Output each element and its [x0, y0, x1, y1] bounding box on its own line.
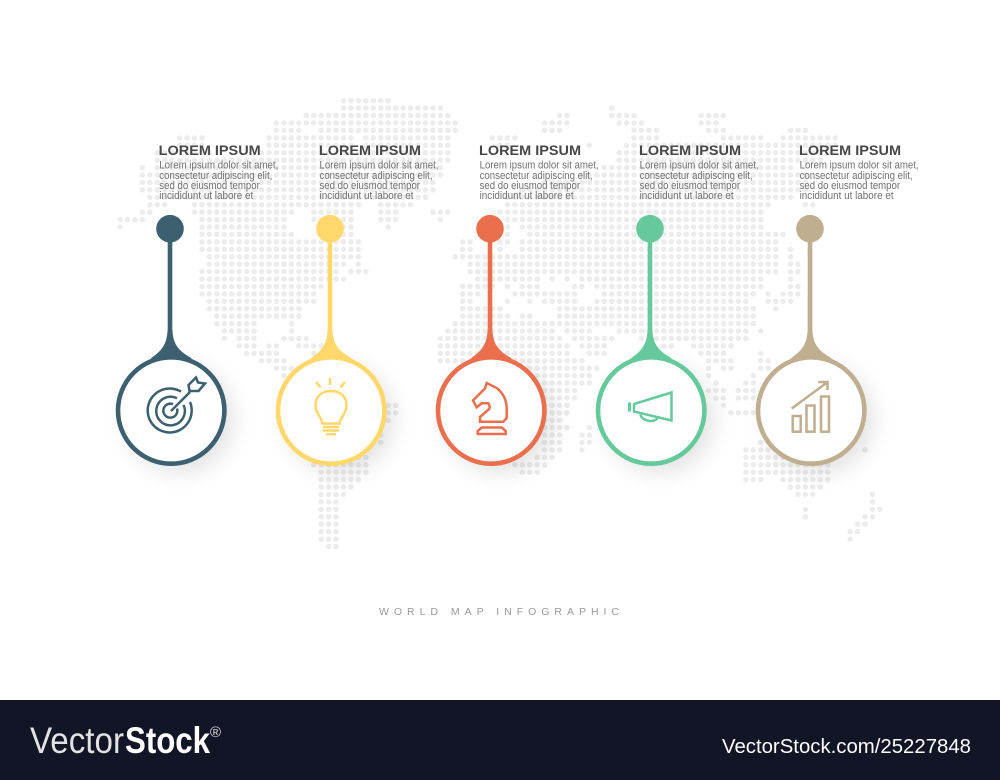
- footer band: [0, 700, 1000, 780]
- step 4: megaphone pin: [598, 215, 714, 473]
- body 1: sed do eiusmod tempor: [159, 180, 260, 192]
- body 4: sed do eiusmod tempor: [640, 180, 741, 192]
- text block 2: [319, 142, 438, 202]
- dotted world map: [120, 101, 880, 546]
- body 4: Lorem ipsum dolor sit amet,: [640, 160, 759, 172]
- body 5: consectetur adipiscing elit,: [800, 170, 913, 182]
- body 1: [159, 160, 278, 202]
- icon: chess knight: [473, 383, 507, 434]
- heading 2: LOREM IPSUM: [319, 142, 421, 158]
- pin shadow: [766, 365, 874, 473]
- step 2: light bulb pin: [278, 215, 394, 473]
- text block 3: [479, 142, 599, 202]
- body 4: consectetur adipiscing elit,: [640, 170, 753, 182]
- pin shadow: [286, 365, 394, 473]
- step 1: target pin: [118, 215, 234, 473]
- body 3: consectetur adipiscing elit,: [480, 170, 593, 182]
- step 3: chess knight pin: [438, 215, 554, 473]
- pin head and stem: [311, 228, 351, 364]
- body 3: incididunt ut labore et: [480, 190, 574, 202]
- icon: bar chart with rising arrow: [792, 382, 829, 432]
- body 2: Lorem ipsum dolor sit amet,: [320, 160, 438, 172]
- body 3: Lorem ipsum dolor sit amet,: [480, 160, 599, 172]
- ring: [598, 357, 704, 464]
- body 2: consectetur adipiscing elit,: [320, 170, 432, 182]
- body 1: consectetur adipiscing elit,: [159, 170, 272, 182]
- pin shadow: [126, 365, 234, 473]
- ring: [278, 357, 384, 464]
- heading 1: LOREM IPSUM: [159, 142, 261, 158]
- body 4: incididunt ut labore et: [640, 190, 734, 202]
- body 1: Lorem ipsum dolor sit amet,: [159, 160, 278, 172]
- pin head and stem: [151, 228, 191, 364]
- caption: WORLD MAP INFOGRAPHIC: [379, 606, 619, 618]
- body 1: incididunt ut labore et: [159, 190, 253, 202]
- icon: light bulb: [316, 378, 346, 434]
- body 2: [320, 160, 438, 202]
- body 5: Lorem ipsum dolor sit amet,: [800, 160, 919, 172]
- footer logo: [30, 720, 221, 761]
- body 4: [640, 160, 759, 202]
- ring: [758, 357, 864, 464]
- footer logo: ®: [210, 724, 221, 741]
- text block 1: [159, 142, 278, 202]
- body 2: incididunt ut labore et: [320, 190, 414, 202]
- pin head and stem: [471, 228, 511, 364]
- pin head and stem: [631, 228, 671, 364]
- ring: [118, 357, 224, 464]
- pin head and stem: [791, 228, 831, 364]
- body 5: incididunt ut labore et: [800, 190, 894, 202]
- body 5: sed do eiusmod tempor: [800, 180, 901, 192]
- text block 5: [799, 142, 919, 202]
- step 5: growth chart pin: [758, 215, 874, 473]
- heading 5: LOREM IPSUM: [799, 142, 901, 158]
- body 3: [480, 160, 599, 202]
- heading 3: LOREM IPSUM: [479, 142, 581, 158]
- heading 4: LOREM IPSUM: [639, 142, 741, 158]
- icon: megaphone: [630, 392, 672, 421]
- pin shadow: [606, 365, 714, 473]
- icon: target with arrow: [148, 378, 205, 432]
- footer logo: Vector: [30, 720, 124, 761]
- body 3: sed do eiusmod tempor: [480, 180, 581, 192]
- body 5: [800, 160, 919, 202]
- body 2: sed do eiusmod tempor: [320, 180, 420, 192]
- text block 4: [639, 142, 759, 202]
- footer logo: Stock: [125, 720, 210, 761]
- pin shadow: [446, 365, 554, 473]
- footer image id: VectorStock.com/25227848: [722, 736, 971, 758]
- ring: [438, 357, 544, 464]
